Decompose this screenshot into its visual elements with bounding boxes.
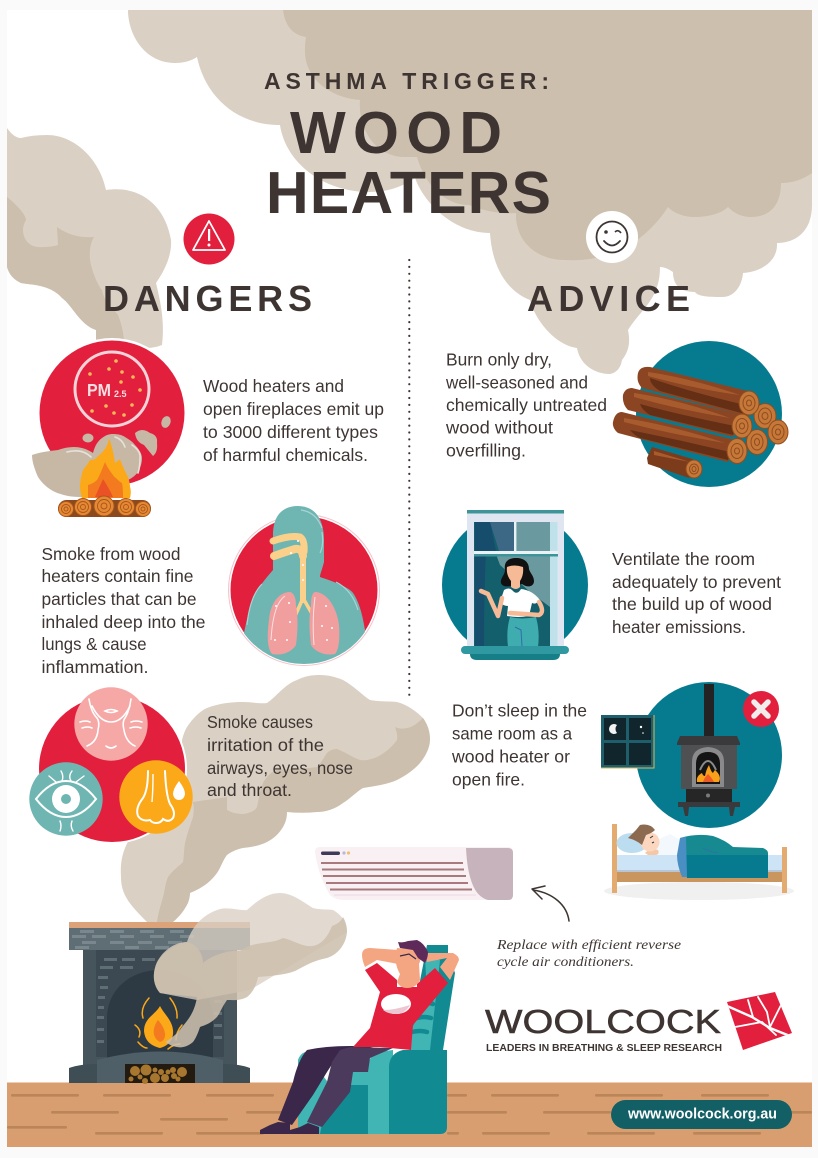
text: advice 1: overfilling. [446,440,526,460]
text: danger 1: of harmful chemicals. [203,445,368,465]
icon: warning triangle [184,214,234,264]
log box [125,1064,195,1084]
armchair [298,945,455,1134]
heading: dangers: DANGERS [103,278,312,319]
smoke: translucent cloud in front of fireplace [154,893,347,1047]
text: advice 3: open fire. [452,770,525,790]
panel: advice 2 window illustration [442,510,588,660]
text: advice 1: well-seasoned and [445,372,588,392]
arrow [532,886,569,921]
logo: Woolcock [485,992,795,1054]
back log ends [746,404,788,454]
text: danger 3: airways, eyes, nose [207,758,353,778]
website pill [611,1100,792,1129]
text: danger 3 [207,712,353,800]
fire flame [135,998,182,1049]
woman figure [481,558,542,647]
text: danger 1 [203,376,384,465]
smoke: left cloud [7,128,171,348]
text: advice 2: heater emissions. [612,617,746,637]
text: danger 1: Wood heaters and [203,376,344,396]
icon: nose [119,760,193,834]
text: danger 2: inhaled deep into the [42,612,206,632]
text: advice 3 [451,700,587,790]
handwritten caption [496,938,681,970]
icon: throat [74,687,148,761]
man relaxing in armchair [260,940,459,1134]
text: advice 1: Burn only dry, [446,350,552,370]
icon: red cross [743,691,779,727]
panel: danger 3 irritation icons [29,687,193,844]
title: HEATERS [266,160,551,226]
text: advice 3: Don’t sleep in the [452,700,587,720]
icon: eye [29,762,103,836]
icon: stove [677,684,740,816]
handwritten caption: cycle air conditioners. [497,955,634,970]
text: danger 3: and throat. [207,780,292,800]
text: danger 2: Smoke from wood [42,544,180,564]
log bodies [638,367,752,416]
rear leg [278,1046,380,1125]
icon: red tree leaf square [725,992,795,1050]
text: advice 1 [445,350,607,460]
text: advice 2: adequately to prevent [612,572,781,592]
shirt [353,963,448,1050]
text: advice 2: the build up of wood [612,594,772,614]
panel: advice 1 logs illustration [613,341,788,487]
title: ASTHMA TRIGGER: [264,68,549,94]
panel: danger 1 PM2.5 illustration: 2.5 [114,389,127,399]
heading: advice: ADVICE [527,278,690,319]
text: advice 3: same room as a [452,724,572,744]
smoke: top right cloud [128,10,812,374]
fireplace [69,922,250,1084]
text: advice 1: wood without [445,418,553,438]
bed with sleeper [604,824,794,900]
title [264,68,551,226]
text: danger 3: irritation of the [207,735,324,755]
arms behind head [362,948,398,967]
front leg [307,1047,393,1127]
icon: night window [601,715,654,768]
icon: winking smiley [586,211,638,263]
text: danger 2: inflammation. [42,657,148,677]
panel: danger 1 PM2.5 illustration [32,338,187,517]
text: danger 2: lungs & cause [42,634,146,654]
logo: Woolcock: LEADERS IN BREATHING & SLEEP RESEARCH [486,1043,722,1054]
panel: advice 3 stove and bed illustration [601,682,794,900]
text: advice 3: wood heater or [451,746,570,766]
air conditioner [315,847,513,900]
handwritten caption: Replace with efficient reverse [496,938,681,953]
smoke: middle column rising from fireplace [121,675,430,922]
text: danger 1: to 3000 different types [203,422,378,442]
text: danger 2 [42,544,206,677]
text: danger 2: heaters contain fine [42,566,194,586]
text: danger 3: Smoke causes [207,712,313,732]
floor [7,1082,812,1147]
logo: Woolcock: WOOLCOCK [485,1003,721,1040]
text: danger 2: particles that can be [42,589,196,609]
panel: danger 1 PM2.5 illustration: PM [87,380,111,400]
panel: danger 2 lungs illustration [228,506,380,680]
text: advice 1: chemically untreated [446,395,607,415]
text: advice 2: Ventilate the room [612,549,755,569]
text: advice 2 [612,549,781,637]
website pill: www.woolcock.org.au [627,1106,777,1122]
head [396,948,421,988]
text: danger 1: open fireplaces emit up [203,399,384,419]
title: WOOD [290,100,502,166]
front log ends [686,391,759,478]
